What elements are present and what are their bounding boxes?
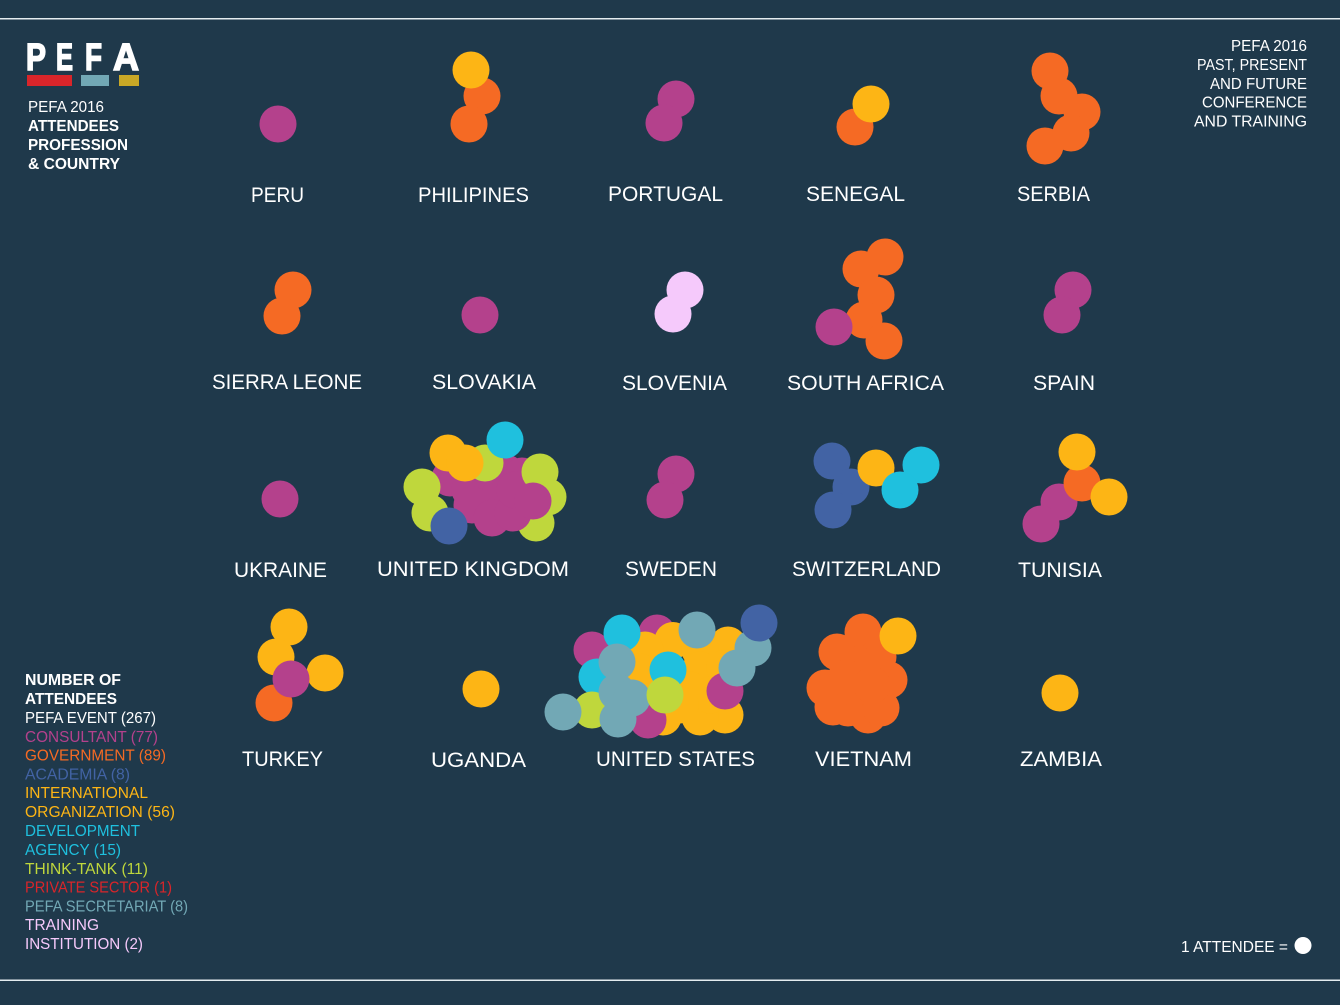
country: Serbia: SERBIA: [1017, 182, 1091, 206]
country: United States: UNITED STATES: [596, 747, 755, 771]
country: South Africa: [787, 238, 945, 395]
legend: number of attendees: PEFA SECRETARIAT (8): [25, 898, 188, 916]
legend: number of attendees: NUMBER OF: [25, 672, 121, 689]
legend: number of attendees: [25, 672, 188, 953]
country: Ukraine: UKRAINE: [234, 558, 327, 582]
country: Senegal: [806, 86, 905, 206]
conference note: PEFA 2016: [1231, 38, 1307, 55]
country: Turkey: [242, 608, 344, 771]
country: Slovenia: SLOVENIA: [622, 371, 728, 395]
logo: PEFA: E: [56, 37, 73, 79]
country: United Kingdom: [377, 422, 569, 581]
legend: number of attendees: AGENCY (15): [25, 842, 121, 859]
country: United Kingdom: UNITED KINGDOM: [377, 557, 569, 581]
title: PROFESSION: [28, 137, 128, 154]
country: Senegal: SENEGAL: [806, 182, 905, 206]
country: Slovakia: [432, 296, 537, 394]
conference note: [1194, 38, 1307, 130]
country: Switzerland: [792, 442, 941, 581]
country: Vietnam: [806, 614, 916, 771]
country: Philippines: [418, 52, 529, 207]
legend: number of attendees: ACADEMIA (8): [25, 766, 130, 784]
logo: PEFA: F: [85, 37, 102, 79]
title: PEFA 2016: [28, 99, 104, 116]
conference note: CONFERENCE: [1202, 94, 1307, 112]
country: South Africa: SOUTH AFRICA: [787, 371, 945, 395]
country: Uganda: [431, 670, 527, 772]
logo: PEFA: P: [26, 37, 46, 79]
title: ATTENDEES: [28, 118, 119, 135]
legend: number of attendees: ORGANIZATION (56): [25, 804, 175, 821]
country: Ukraine: [234, 480, 327, 582]
title: [28, 99, 128, 173]
country: Turkey: TURKEY: [242, 747, 323, 771]
conference note: AND TRAINING: [1194, 114, 1307, 130]
logo: PEFA: [26, 37, 139, 86]
legend: number of attendees: THINK-TANK (11): [25, 861, 148, 878]
country: Slovakia: SLOVAKIA: [432, 370, 537, 394]
legend: number of attendees: ATTENDEES: [25, 691, 117, 708]
legend: number of attendees: INSTITUTION (2): [25, 936, 143, 953]
country: Tunisia: [1018, 434, 1128, 582]
country: Philippines: PHILIPINES: [418, 183, 529, 207]
country: Peru: [251, 106, 304, 207]
legend: number of attendees: INTERNATIONAL: [25, 785, 148, 802]
country: Sierra Leone: SIERRA LEONE: [212, 370, 362, 394]
country: Switzerland: SWITZERLAND: [792, 557, 941, 581]
title: & COUNTRY: [28, 156, 121, 173]
legend: number of attendees: TRAINING: [25, 917, 99, 934]
conference note: PAST, PRESENT: [1197, 57, 1307, 74]
country: Vietnam: VIETNAM: [815, 747, 912, 771]
country: Portugal: PORTUGAL: [608, 182, 723, 206]
country: Tunisia: TUNISIA: [1018, 558, 1103, 582]
country: Uganda: UGANDA: [431, 748, 527, 772]
logo: PEFA: A: [113, 37, 139, 79]
country: Sierra Leone: [212, 272, 362, 394]
legend: number of attendees: GOVERNMENT (89): [25, 748, 166, 764]
legend: number of attendees: CONSULTANT (77): [25, 729, 158, 746]
country: United States: [544, 604, 778, 771]
country: Serbia: [1017, 52, 1100, 206]
country: Spain: SPAIN: [1033, 371, 1095, 395]
scale key: 1 attendee: 1 ATTENDEE =: [1181, 939, 1288, 956]
country: Zambia: ZAMBIA: [1020, 747, 1103, 771]
country: Slovenia: [622, 272, 728, 395]
country: Sweden: SWEDEN: [625, 557, 717, 581]
legend: number of attendees: PRIVATE SECTOR (1): [25, 880, 172, 896]
country: Portugal: [608, 80, 723, 206]
conference note: AND FUTURE: [1210, 76, 1307, 93]
legend: number of attendees: DEVELOPMENT: [25, 823, 141, 840]
country: Peru: PERU: [251, 183, 304, 207]
country: Zambia: [1020, 674, 1103, 771]
country: Sweden: [625, 456, 717, 581]
country: Spain: [1033, 272, 1095, 395]
legend: number of attendees: PEFA EVENT (267): [25, 710, 156, 727]
